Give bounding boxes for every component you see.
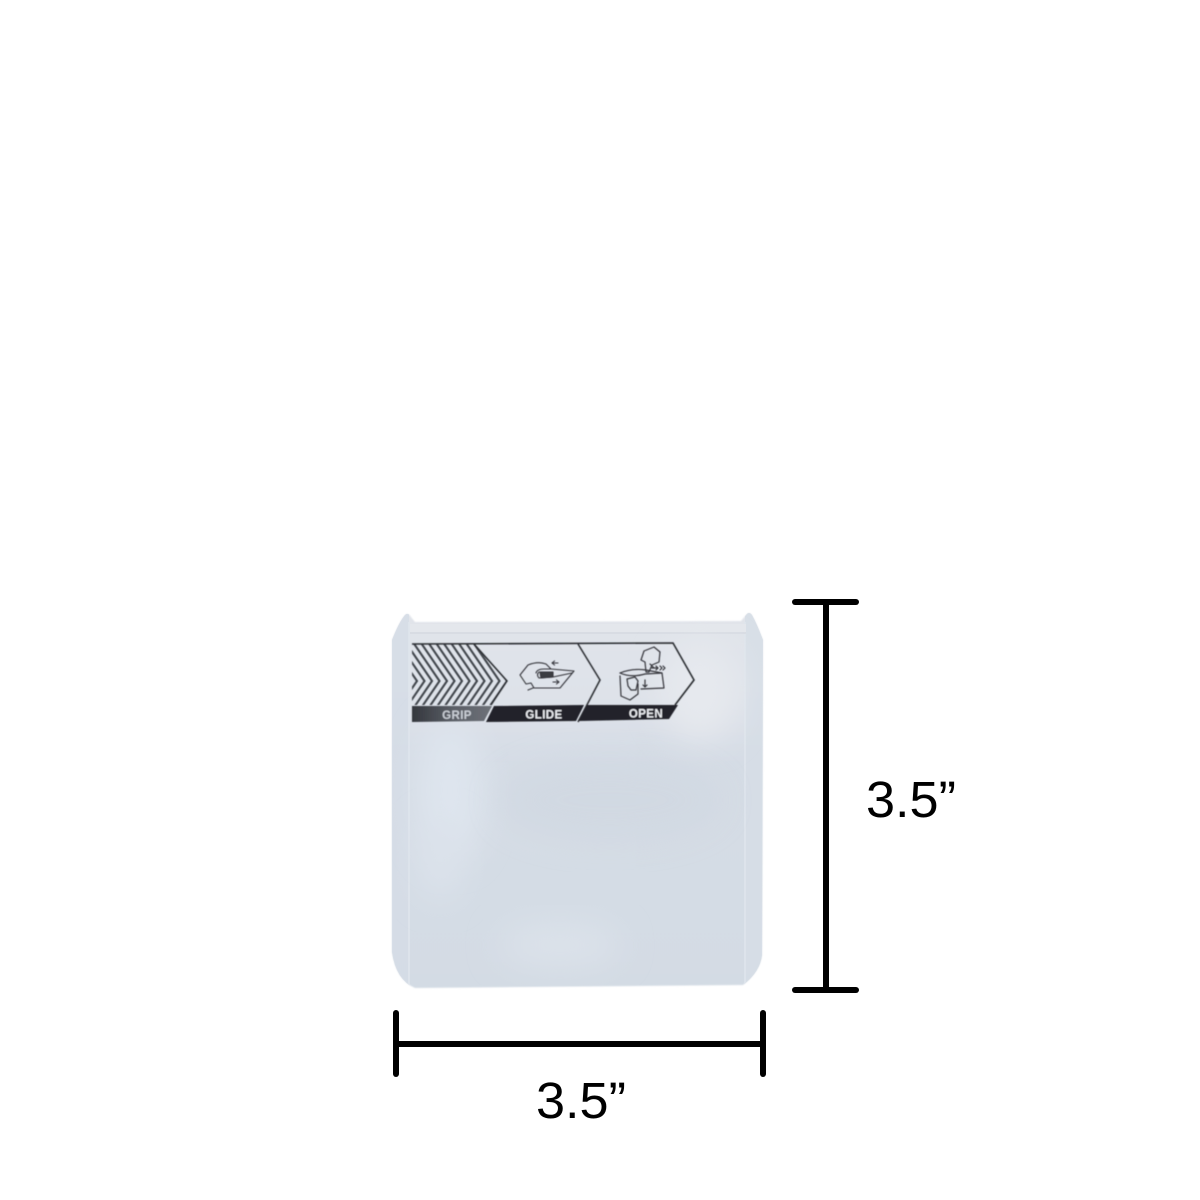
height dimension line [792, 599, 859, 993]
left tick [393, 1010, 399, 1077]
pouch shading [392, 612, 763, 992]
glide label bar [486, 705, 584, 722]
width dimension line [393, 1010, 766, 1077]
icon: hand opening the pouch [620, 647, 665, 700]
right tick [760, 1010, 766, 1077]
top tick [792, 599, 859, 605]
infographic: pouch with dimensions [392, 599, 954, 1118]
icon: hand gliding the slider [520, 661, 574, 690]
width label: 3.5” [536, 1072, 626, 1129]
pouch [374, 612, 763, 992]
height label: 3.5” [866, 771, 956, 828]
instruction strip: grip, glide, open [411, 641, 696, 723]
grip chevron hatching [411, 644, 506, 706]
width bar [396, 1041, 763, 1047]
grip label: GRIP [442, 710, 472, 722]
grip label bar [412, 706, 492, 722]
bottom tick [792, 987, 859, 993]
height bar [823, 601, 829, 990]
open label bar [579, 705, 678, 721]
strip outline [412, 643, 694, 705]
pouch body [392, 613, 763, 988]
open label: OPEN [629, 708, 663, 720]
glide label: GLIDE [525, 710, 563, 722]
chevron dividers [474, 644, 600, 722]
